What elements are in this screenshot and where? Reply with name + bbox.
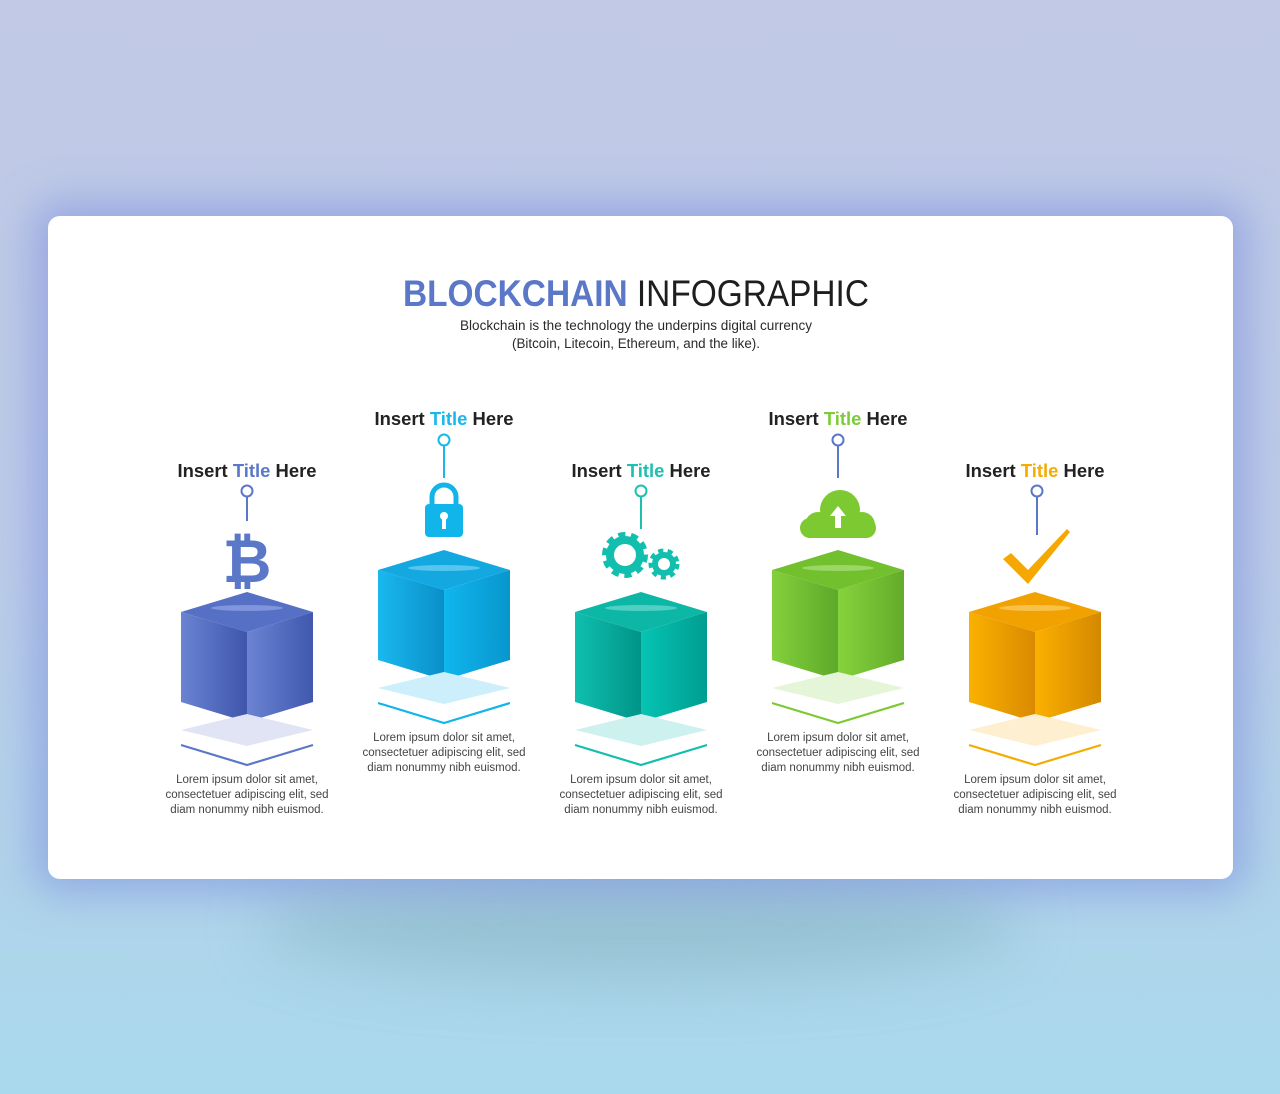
heading: Insert Title Here	[966, 461, 1104, 481]
pin	[1032, 486, 1042, 535]
pin	[242, 486, 252, 521]
panel: step 4 cloud	[756, 409, 920, 774]
icon: gears	[605, 535, 677, 577]
title: BLOCKCHAIN INFOGRAPHIC	[403, 273, 869, 314]
text block: Lorem ipsum dolor sit amet,	[964, 774, 1106, 786]
cube	[575, 592, 707, 765]
text block: consectetuer adipiscing elit, sed	[559, 789, 723, 801]
text block: consectetuer adipiscing elit, sed	[165, 789, 329, 801]
text block: diam nonummy nibh euismod.	[761, 762, 915, 774]
text block: Lorem ipsum dolor sit amet,	[767, 732, 909, 744]
panel: step 2 lock	[362, 409, 526, 774]
card	[48, 216, 1233, 879]
text block	[756, 732, 920, 774]
subtitle	[460, 318, 812, 351]
text block	[362, 732, 526, 774]
cube	[378, 550, 510, 723]
text block	[953, 774, 1117, 816]
icon: cloud upload	[800, 490, 876, 538]
icon: lock	[425, 485, 463, 537]
icon: bitcoin: ₿	[223, 528, 271, 595]
text block: diam nonummy nibh euismod.	[170, 804, 324, 816]
panel: step 5 check	[953, 461, 1117, 816]
pin	[438, 434, 450, 478]
panel: step 1 bitcoin	[165, 461, 329, 816]
subtitle: Blockchain is the technology the underpins digital currency	[460, 318, 812, 333]
text block: diam nonummy nibh euismod.	[367, 762, 521, 774]
text block	[165, 774, 329, 816]
cube	[969, 592, 1101, 765]
heading: Insert Title Here	[768, 409, 908, 429]
panel: step 3 gears	[559, 461, 723, 816]
text block: diam nonummy nibh euismod.	[958, 804, 1112, 816]
pin	[832, 434, 844, 478]
text block: Lorem ipsum dolor sit amet,	[176, 774, 318, 786]
pin	[636, 486, 646, 529]
cube	[181, 592, 313, 765]
subtitle: (Bitcoin, Litecoin, Ethereum, and the like).	[512, 336, 760, 351]
text block: consectetuer adipiscing elit, sed	[953, 789, 1117, 801]
heading: Insert Title Here	[178, 461, 316, 481]
text block: Lorem ipsum dolor sit amet,	[373, 732, 515, 744]
cube	[772, 550, 904, 723]
text block	[559, 774, 723, 816]
text block: consectetuer adipiscing elit, sed	[362, 747, 526, 759]
text block: diam nonummy nibh euismod.	[564, 804, 718, 816]
heading: Insert Title Here	[572, 461, 710, 481]
text block: Lorem ipsum dolor sit amet,	[570, 774, 712, 786]
icon: checkmark	[1003, 529, 1070, 584]
text block: consectetuer adipiscing elit, sed	[756, 747, 920, 759]
heading: Insert Title Here	[374, 409, 514, 429]
